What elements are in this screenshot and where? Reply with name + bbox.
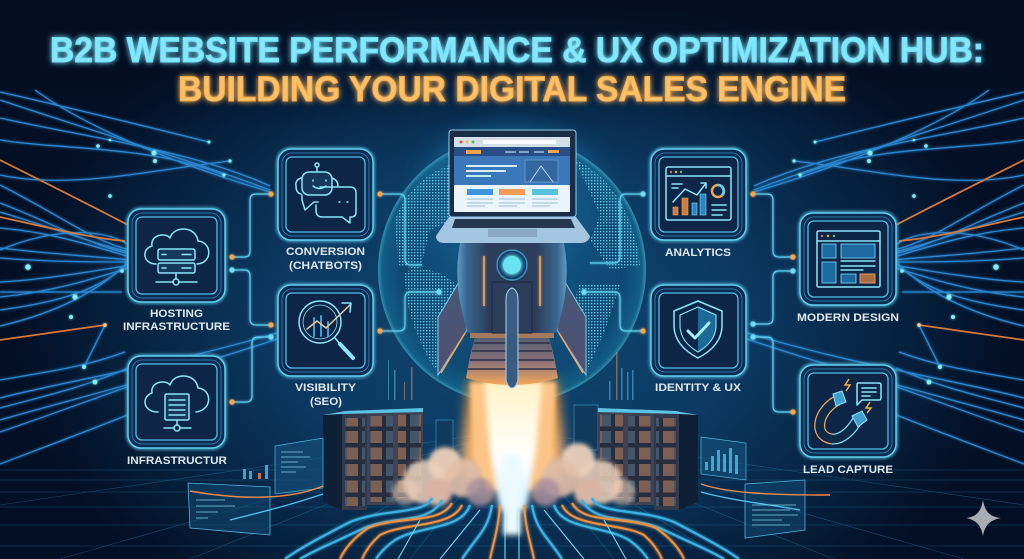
icon: magnifier chart: [299, 301, 353, 358]
central glow: [422, 130, 602, 270]
panel: hosting infrastructure: [128, 209, 225, 302]
server racks: right: [598, 408, 698, 510]
network lines: left: [0, 90, 280, 464]
background towers: [436, 405, 598, 466]
panel: conversion chatbots: [278, 149, 373, 240]
panel: infrastructure: [128, 356, 225, 448]
rocket body: [457, 243, 567, 333]
title: BUILDING YOUR DIGITAL SALES ENGINE: [178, 70, 846, 109]
porthole: [497, 250, 527, 280]
server racks: left: [323, 408, 423, 510]
panel: visibility seo: [278, 285, 373, 376]
network lines: right: [744, 90, 1024, 464]
icon: sparkle watermark: [966, 500, 1001, 536]
icon: magnet: [820, 379, 881, 439]
icon: analytics dashboard: [666, 167, 731, 220]
icon: cloud server: [145, 229, 209, 285]
light column: [503, 455, 521, 535]
globe: [378, 136, 646, 404]
icon: shield check: [674, 301, 722, 358]
title: [50, 31, 984, 109]
label: visibility seo: VISIBILITY: [295, 382, 357, 394]
label: conversion chatbots: [286, 246, 365, 272]
label: conversion chatbots: (CHATBOTS): [289, 260, 362, 272]
laptop screen: [454, 137, 570, 212]
label: lead capture: LEAD CAPTURE: [803, 464, 893, 476]
panel: code screen left front: [188, 483, 270, 535]
panel: analytics: [651, 149, 746, 240]
panel: code screen left rear: [275, 438, 323, 494]
globe continents: [395, 160, 640, 375]
rocket nozzle: [466, 333, 558, 385]
smoke clouds: [392, 443, 635, 506]
label: hosting infrastructure: HOSTING: [150, 308, 203, 320]
panel: modern design: [800, 213, 896, 305]
laptop: [436, 130, 590, 243]
label: visibility seo: [295, 382, 357, 408]
icon: web layout: [817, 231, 880, 287]
icon: cloud document: [145, 376, 209, 431]
floor grid: [0, 430, 1024, 559]
label: analytics: ANALYTICS: [665, 247, 731, 259]
data streams: left: [285, 498, 505, 559]
holographic panels: [188, 437, 830, 538]
label: identity and ux: IDENTITY & UX: [655, 382, 742, 394]
panel: lead capture: [800, 365, 896, 457]
label: infrastructur: INFRASTRUCTUR: [127, 455, 227, 467]
title: B2B WEBSITE PERFORMANCE & UX OPTIMIZATION HUB:: [50, 31, 984, 70]
laptop lid: [449, 130, 576, 217]
label: modern design: MODERN DESIGN: [797, 312, 899, 324]
rocket: [438, 243, 586, 388]
panel: identity and ux: [651, 285, 746, 376]
rocket centre fin: [506, 288, 518, 388]
rocket fins: [438, 282, 586, 375]
label: hosting infrastructure: [123, 308, 230, 333]
panel: code screen right front: [745, 480, 805, 538]
flame: [460, 380, 566, 510]
label: conversion chatbots: CONVERSION: [286, 246, 365, 258]
label: hosting infrastructure: INFRASTRUCTURE: [123, 321, 230, 333]
connectors: [229, 191, 796, 415]
data streams: right: [519, 498, 739, 559]
small vertical bars: [388, 352, 634, 400]
label: visibility seo: (SEO): [310, 396, 342, 408]
laptop base: [436, 217, 590, 243]
central stream: [510, 500, 514, 559]
panel: chart screen right rear: [701, 437, 746, 480]
icon: chatbot: [296, 163, 356, 223]
